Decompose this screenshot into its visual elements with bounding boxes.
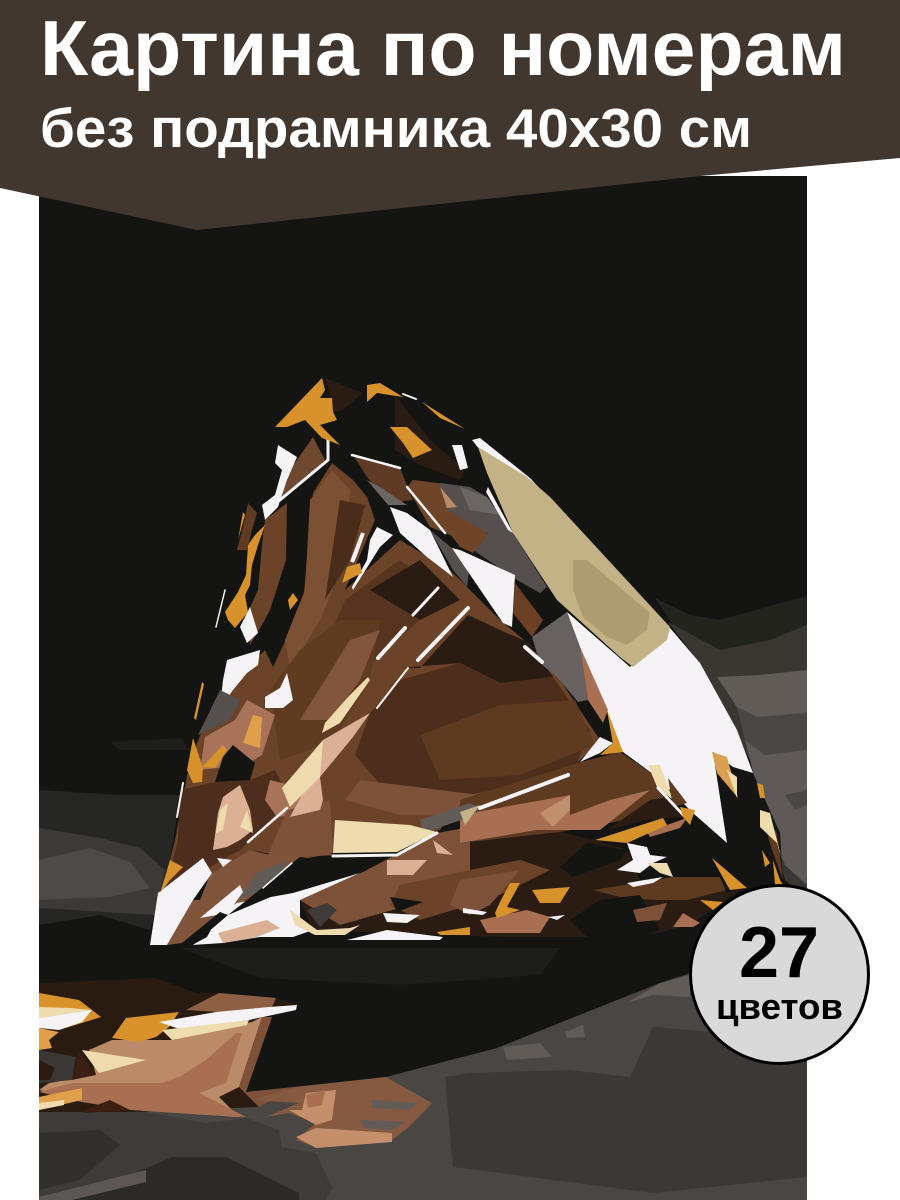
background: grey haze right bbox=[655, 596, 807, 900]
diamond: white and beige facets bbox=[150, 438, 782, 945]
diamond body bbox=[160, 378, 600, 945]
painting: diamond on dark background bbox=[39, 176, 807, 1200]
diamond: thin white lines bbox=[177, 394, 688, 888]
background: lower grey ground bbox=[39, 945, 807, 1200]
diamond: lower right facets bbox=[300, 752, 783, 945]
title: Картина по номерам bbox=[40, 4, 846, 92]
diamond: amber accents bbox=[160, 378, 783, 935]
header banner bbox=[0, 0, 900, 230]
badge label: цветов bbox=[716, 986, 843, 1027]
badge: 27 colours bbox=[690, 886, 868, 1064]
background: left grey haze bbox=[39, 738, 560, 985]
badge number: 27 bbox=[739, 913, 819, 993]
subtitle: без подрамника 40х30 см bbox=[40, 97, 752, 159]
reflection: warm glow lower left bbox=[39, 978, 432, 1148]
